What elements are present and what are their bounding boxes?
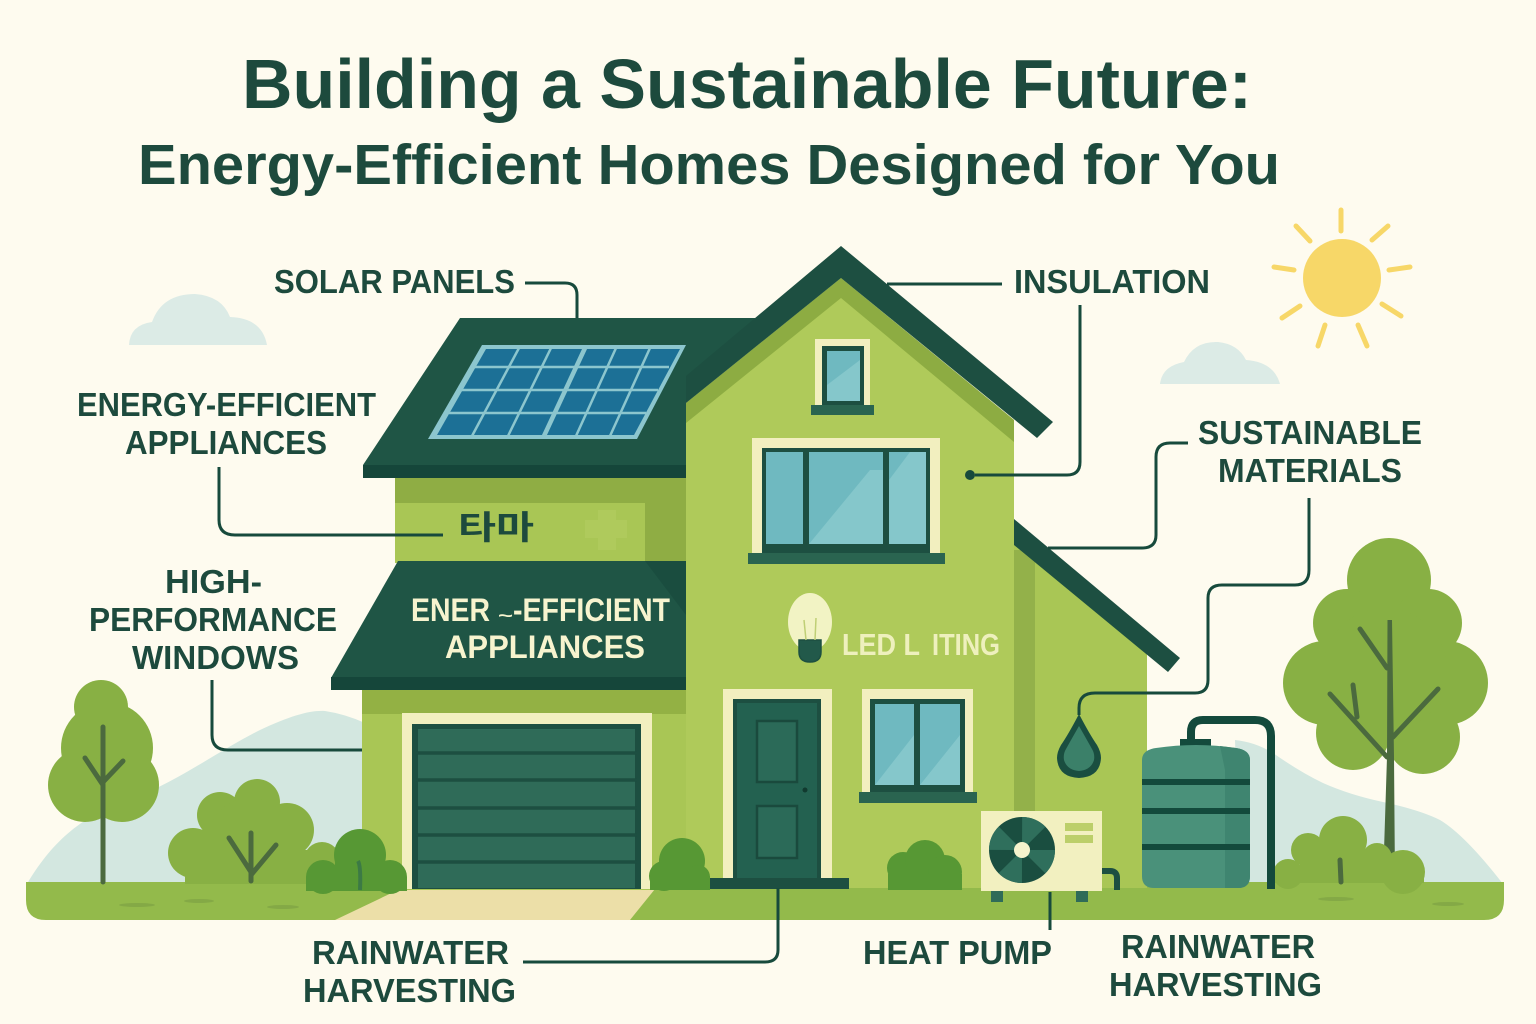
label: high-performance windows: PERFORMANCE (89, 601, 337, 638)
label: rainwater harvesting left (303, 934, 516, 1009)
label: energy-efficient appliances (77, 386, 376, 461)
icon: LED bulb (788, 593, 832, 662)
label: awning text: -EFFICIENT (513, 592, 670, 628)
shrub: right (1273, 816, 1425, 894)
label: high-performance windows: WINDOWS (132, 639, 299, 676)
leader dot: insulation (965, 470, 975, 480)
label: sustainable materials: MATERIALS (1218, 452, 1402, 489)
icon: sun (1274, 210, 1410, 346)
rainwater tank (1142, 720, 1271, 889)
window: attic (811, 339, 874, 415)
window: upper large (748, 438, 945, 564)
label: rainwater harvesting right: RAINWATER (1121, 928, 1315, 965)
label: high-performance windows (89, 563, 337, 676)
label: insulation: INSULATION (1014, 263, 1210, 300)
garage door (402, 713, 652, 889)
house: left upper wall (395, 477, 686, 563)
roof: main gable (686, 246, 1053, 438)
icon: cloud right (1160, 342, 1280, 384)
label: sustainable materials (1198, 414, 1422, 489)
title: Energy-Efficient Homes Designed for You (138, 133, 1280, 197)
icon: cloud left (129, 294, 267, 345)
tree: left (48, 680, 159, 882)
label: awning text: ~ (498, 606, 513, 625)
label: awning text (411, 592, 670, 665)
label: awning text: APPLIANCES (445, 629, 645, 665)
label: energy-efficient appliances: ENERGY-EFFICIENT (77, 386, 376, 423)
shrub: under window (887, 840, 962, 890)
shrub: near garage (306, 829, 407, 894)
label: rainwater harvesting left: HARVESTING (303, 972, 516, 1009)
driveway (335, 889, 655, 920)
label: rainwater harvesting right (1109, 928, 1322, 1003)
shrub: by door (649, 838, 710, 891)
awning roof (331, 561, 686, 690)
background hills (27, 711, 1503, 888)
house: lower left wall (362, 688, 686, 890)
label: sustainable materials: SUSTAINABLE (1198, 414, 1422, 451)
label: energy-efficient appliances: APPLIANCES (125, 424, 327, 461)
leader lines (212, 283, 1309, 962)
label: rainwater harvesting right: HARVESTING (1109, 966, 1322, 1003)
label: garbled sign: 타마 (458, 509, 534, 546)
house: main body (686, 278, 1014, 888)
label: awning text: ENER (411, 592, 490, 628)
label: rainwater harvesting left: RAINWATER (312, 934, 509, 971)
label: high-performance windows: HIGH- (165, 563, 262, 600)
solar panels (428, 345, 686, 439)
small wall patch (585, 510, 627, 550)
roof: side extension (1014, 519, 1180, 672)
label: solar panels: SOLAR PANELS (274, 263, 515, 300)
heat pump unit (981, 811, 1117, 902)
icon: water drop (1057, 714, 1101, 778)
label: LED lighting (842, 627, 1000, 662)
label: LED lighting: ITING (932, 627, 1000, 662)
title (138, 45, 1280, 197)
tree: right (1283, 538, 1488, 882)
window: lower (859, 689, 977, 803)
label: heat pump: HEAT PUMP (863, 934, 1052, 971)
door (705, 689, 849, 889)
house: side extension (1014, 540, 1147, 890)
roof: left main (363, 318, 760, 478)
shrub: left large (168, 779, 340, 884)
title: Building a Sustainable Future: (242, 45, 1252, 123)
ground (26, 882, 1504, 920)
label: LED lighting: LED L (842, 627, 920, 662)
